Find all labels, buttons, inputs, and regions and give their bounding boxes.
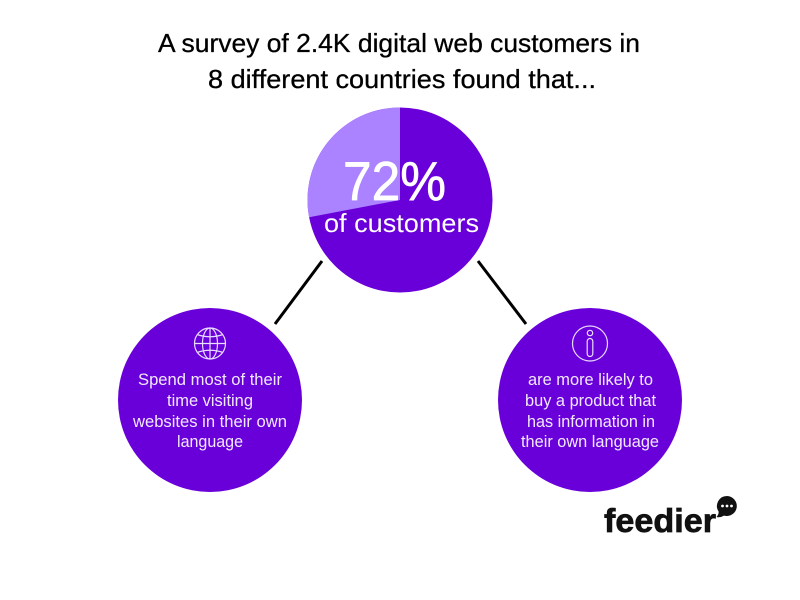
text: left circle: websites in their own (132, 413, 287, 431)
text: left circle: time visiting (167, 392, 253, 410)
panel: websites in own language (118, 308, 302, 492)
text: left circle: language (177, 433, 243, 451)
connector: right (478, 261, 526, 324)
pie chart: 72% of customers: of customers (324, 208, 479, 238)
icon: info (572, 326, 608, 361)
text: left circle: Spend most of their (138, 371, 283, 389)
title: 8 different countries found that... (208, 64, 596, 94)
text: right circle: their own language (521, 433, 659, 451)
icon: speech bubble (716, 496, 737, 517)
text: left circle (132, 371, 287, 451)
text: right circle: are more likely to (528, 371, 653, 389)
pie chart: 72% of customers: 72% (343, 150, 446, 212)
title (158, 28, 640, 94)
title: A survey of 2.4K digital web customers in (158, 28, 640, 58)
connector: left (275, 261, 322, 324)
text: right circle: has information in (527, 413, 655, 431)
pie chart: 72% of customers (307, 107, 492, 292)
icon: globe (194, 328, 226, 359)
logo: feedier: feedier (604, 502, 716, 539)
panel: product information in own language (498, 308, 682, 492)
text: right circle (521, 371, 659, 451)
text: right circle: buy a product that (525, 392, 656, 410)
